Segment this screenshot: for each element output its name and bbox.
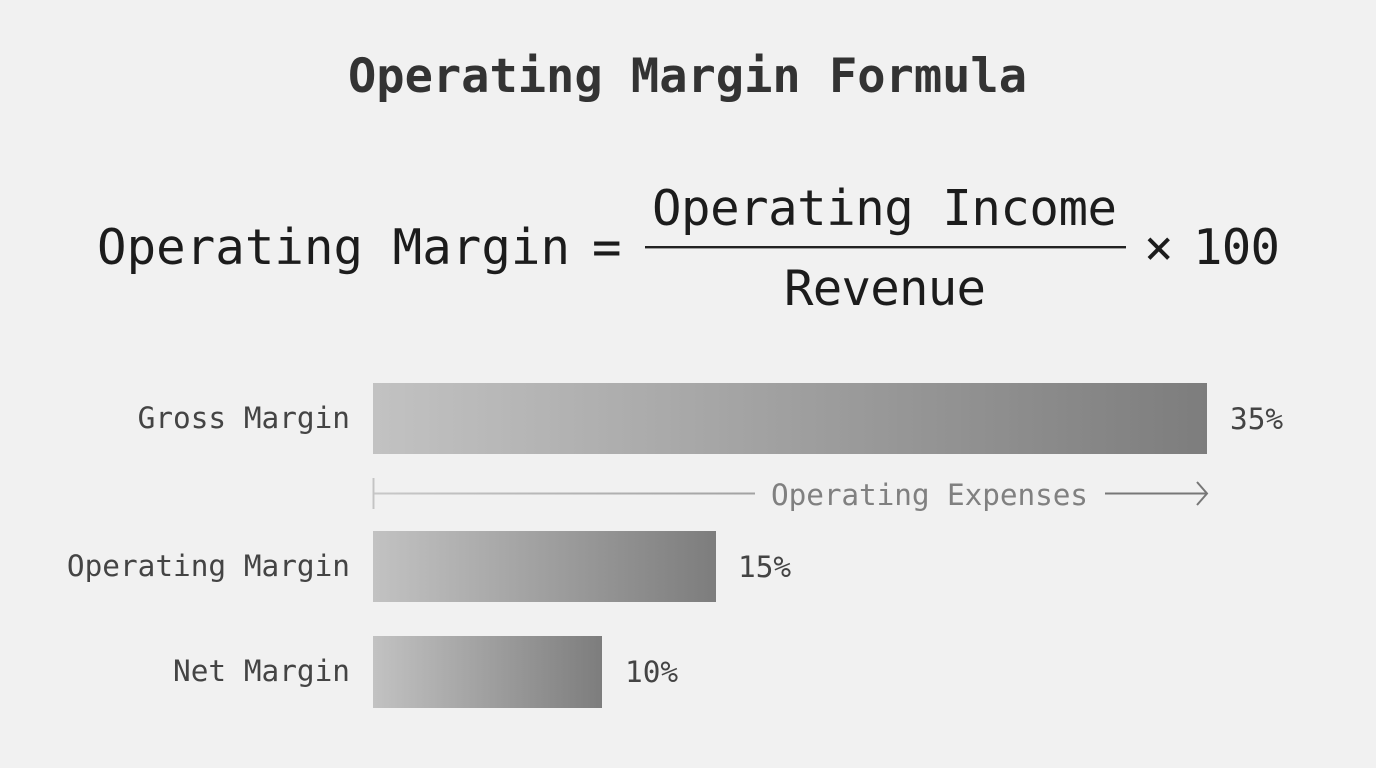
formula left side: Operating Margin <box>97 219 570 276</box>
arrow <box>1105 482 1207 505</box>
bar: operating margin <box>373 531 716 602</box>
left tick and line <box>373 478 755 509</box>
number 100: 100 <box>1193 219 1280 276</box>
denominator: Revenue <box>784 260 986 317</box>
formula <box>97 180 1280 317</box>
title: Operating Margin Formula <box>348 49 1027 104</box>
operating expenses bracket arrow <box>373 478 1207 512</box>
multiply sign: × <box>1144 219 1174 276</box>
numerator: Operating Income <box>652 180 1117 237</box>
row: net margin <box>173 636 678 708</box>
value: 10%: 10% <box>625 655 678 689</box>
bar: net margin <box>373 636 602 708</box>
row: gross margin <box>138 383 1283 454</box>
label: gross margin: Gross Margin <box>138 401 350 435</box>
row: operating margin <box>67 531 791 602</box>
label: net margin: Net Margin <box>173 654 350 688</box>
bar: gross margin <box>373 383 1207 454</box>
label: operating margin: Operating Margin <box>67 549 350 583</box>
value: 35%: 35% <box>1230 402 1283 436</box>
equals sign: = <box>592 219 622 276</box>
label: operating expenses: Operating Expenses <box>771 478 1088 512</box>
value: 15%: 15% <box>738 550 791 584</box>
fraction bar <box>645 246 1126 248</box>
